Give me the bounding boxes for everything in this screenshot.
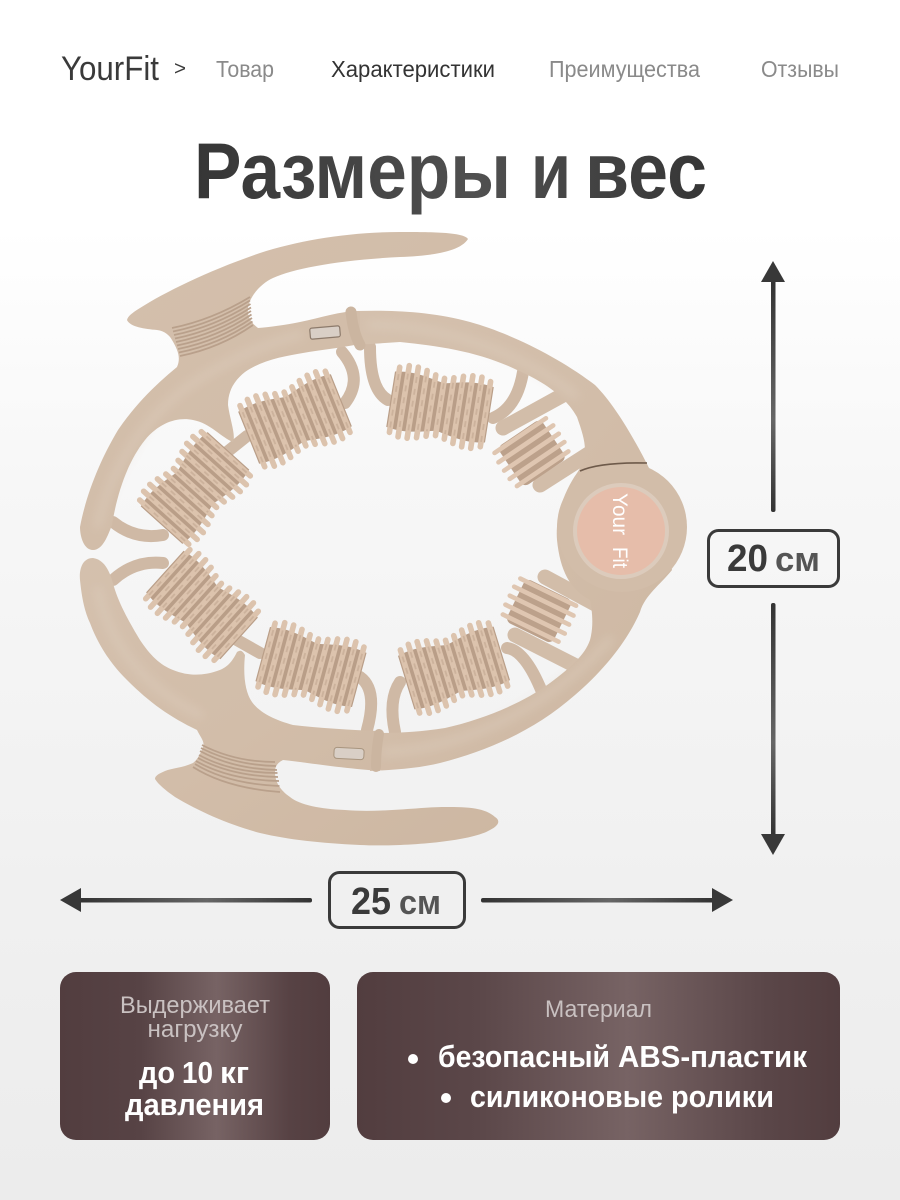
label 25 cm [330,872,464,928]
roller stalks [113,347,542,732]
material item 2: силиконовые [470,1079,663,1114]
material item 2: ролики [671,1079,774,1114]
nav item: Отзывы: Отзывы [761,56,839,82]
arrow left [60,888,312,912]
roller: top right [385,364,495,450]
nav item: Преимущества: Преимущества [549,56,700,82]
title: Размеры [194,126,511,215]
roller: small upper right [491,415,573,491]
frame: upper left arm and ring [80,232,468,550]
latch button: bottom [334,747,364,760]
arrow up [761,261,785,512]
product illustration: massage roller [80,232,687,845]
hub logo text: Fit [608,547,631,568]
hub [557,462,687,592]
roller: small lower right [499,575,579,647]
panel label: Выдерживает [120,992,270,1019]
breadcrumb chevron: > [174,58,186,80]
title [194,126,707,215]
label 20 cm: 20 [727,538,768,580]
hub peach cap [577,487,665,575]
hub housing [557,462,687,592]
panel background [60,972,330,1140]
height dimension [708,261,838,855]
frame: lower left arm and ring [80,558,498,845]
panel: load capacity [60,972,330,1140]
label 25 cm: см [399,884,441,922]
roller: lower left [141,545,263,665]
label 20 cm [708,530,838,586]
navigation bar [61,50,839,88]
panel label: Материал [545,996,652,1023]
roller: upper left [135,427,255,549]
hub rim [573,483,669,579]
panel background [357,972,840,1140]
material item 1: ABS-пластик [618,1039,807,1074]
frame highlights [98,325,610,752]
hub logo text: Your [608,493,631,535]
frame: right ring section [355,311,672,771]
arrow down [761,603,785,855]
ribbed grip: bottom [193,745,280,792]
roller: bottom right [396,619,512,717]
arrow right [481,888,733,912]
width dimension [60,872,733,928]
panel: material [357,972,840,1140]
label 25 cm: 25 [351,881,391,923]
ribbed grip: top [172,297,253,356]
label 20 cm: см [775,541,820,579]
bullet [408,1054,418,1064]
panel value: кг [220,1055,249,1090]
material item 1: безопасный [438,1039,610,1074]
brand logo: YourFit [61,50,160,88]
roller: top left [235,367,355,471]
collar: top joint [351,312,360,345]
material item 2 [470,1079,774,1114]
title: вес [585,126,707,215]
material item 1 [438,1039,807,1074]
panel label line 2: нагрузку [148,1016,242,1043]
nav item: Товар: Товар [216,56,274,82]
panel value: до [139,1055,175,1090]
collar: bottom joint [376,734,379,767]
hub seam [580,463,647,471]
bullet [441,1093,451,1103]
nav item: Характеристики: Характеристики [331,56,495,82]
panel value [139,1055,249,1090]
title: и [531,126,571,215]
hub logo text [608,493,631,568]
panel value: 10 [182,1055,213,1090]
panel value line 2: давления [125,1087,264,1122]
roller: bottom left [253,619,369,715]
latch button: top [310,326,340,339]
